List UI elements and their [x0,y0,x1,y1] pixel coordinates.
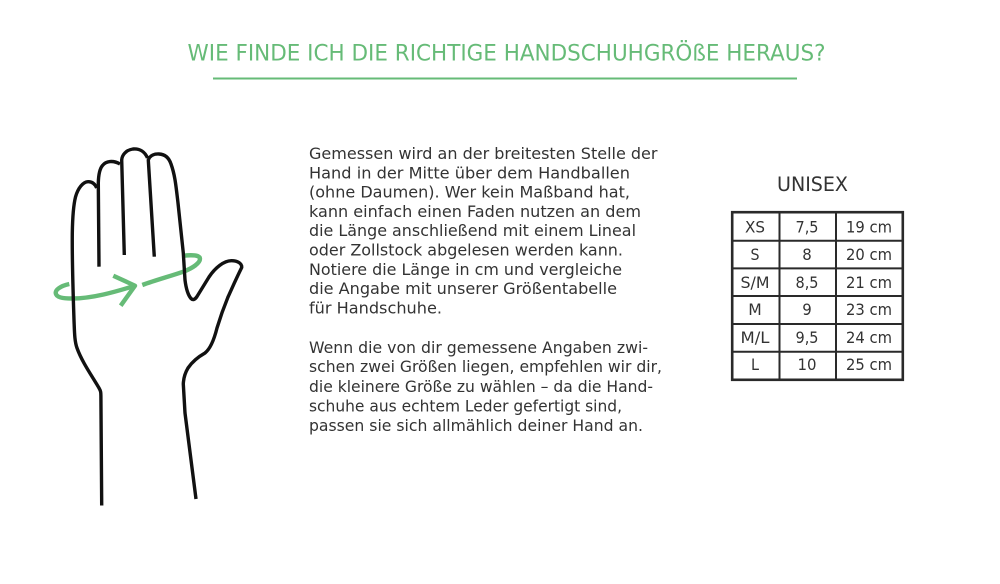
text block: measuring instructions: (ohne Daumen). Wer kein Maßband hat, [309,183,630,202]
table rows: 23 cm [846,300,892,319]
icon: hand outline [72,149,242,505]
text block: size advice: schen zwei Größen liegen, empfehlen wir dir, [309,357,662,376]
table rows: 10 [798,355,816,374]
size table [732,212,903,380]
heading: unisex: UNISEX [777,173,848,196]
text block: measuring instructions: die Länge anschließend mit einem Lineal [309,221,636,240]
text block: measuring instructions [309,144,658,318]
text block: measuring instructions: oder Zollstock abgelesen werden kann. [309,240,623,260]
text block: measuring instructions: Notiere die Länge in cm und vergleiche [309,260,622,279]
text block: measuring instructions: Gemessen wird an der breitesten Stelle der [309,144,658,163]
table rows: 21 cm [846,273,892,292]
table rows: 8 [802,245,812,264]
table rows: L [751,355,759,374]
table rows: 19 cm [846,218,892,236]
text block: size advice: die kleinere Größe zu wählen – da die Hand- [309,377,653,396]
table rows: M [748,300,762,319]
illustration: hand with measuring thread [56,149,242,505]
text block: measuring instructions: Hand in der Mitte über dem Handballen [309,163,630,182]
table rows: 25 cm [846,355,892,374]
text block: size advice: passen sie sich allmählich deiner Hand an. [309,416,643,435]
icon: green measuring loop with arrow [56,255,200,306]
table rows: 9,5 [796,328,818,347]
text block: measuring instructions: die Angabe mit unserer Größentabelle [309,279,617,298]
text block: size advice: Wenn die von dir gemessene Angaben zwi- [309,338,648,357]
text block: measuring instructions: kann einfach einen Faden nutzen an dem [309,202,641,221]
table rows: S [750,245,760,264]
table rows: M/L [740,328,770,347]
text block: size advice: schuhe aus echtem Leder gefertigt sind, [309,396,622,415]
table rows: 9 [802,300,812,319]
table rows [740,218,892,374]
table rows: 24 cm [846,328,892,347]
text block: size advice [309,338,662,435]
title: WIE FINDE ICH DIE RICHTIGE HANDSCHUHGRÖßE HERAUS? [188,39,826,67]
text block: measuring instructions: für Handschuhe. [309,299,442,318]
table grid [732,212,903,380]
table rows: 8,5 [796,273,818,292]
table rows: 7,5 [796,218,818,236]
table rows: S/M [740,273,770,292]
table rows: 20 cm [846,245,892,264]
table rows: XS [745,218,765,236]
